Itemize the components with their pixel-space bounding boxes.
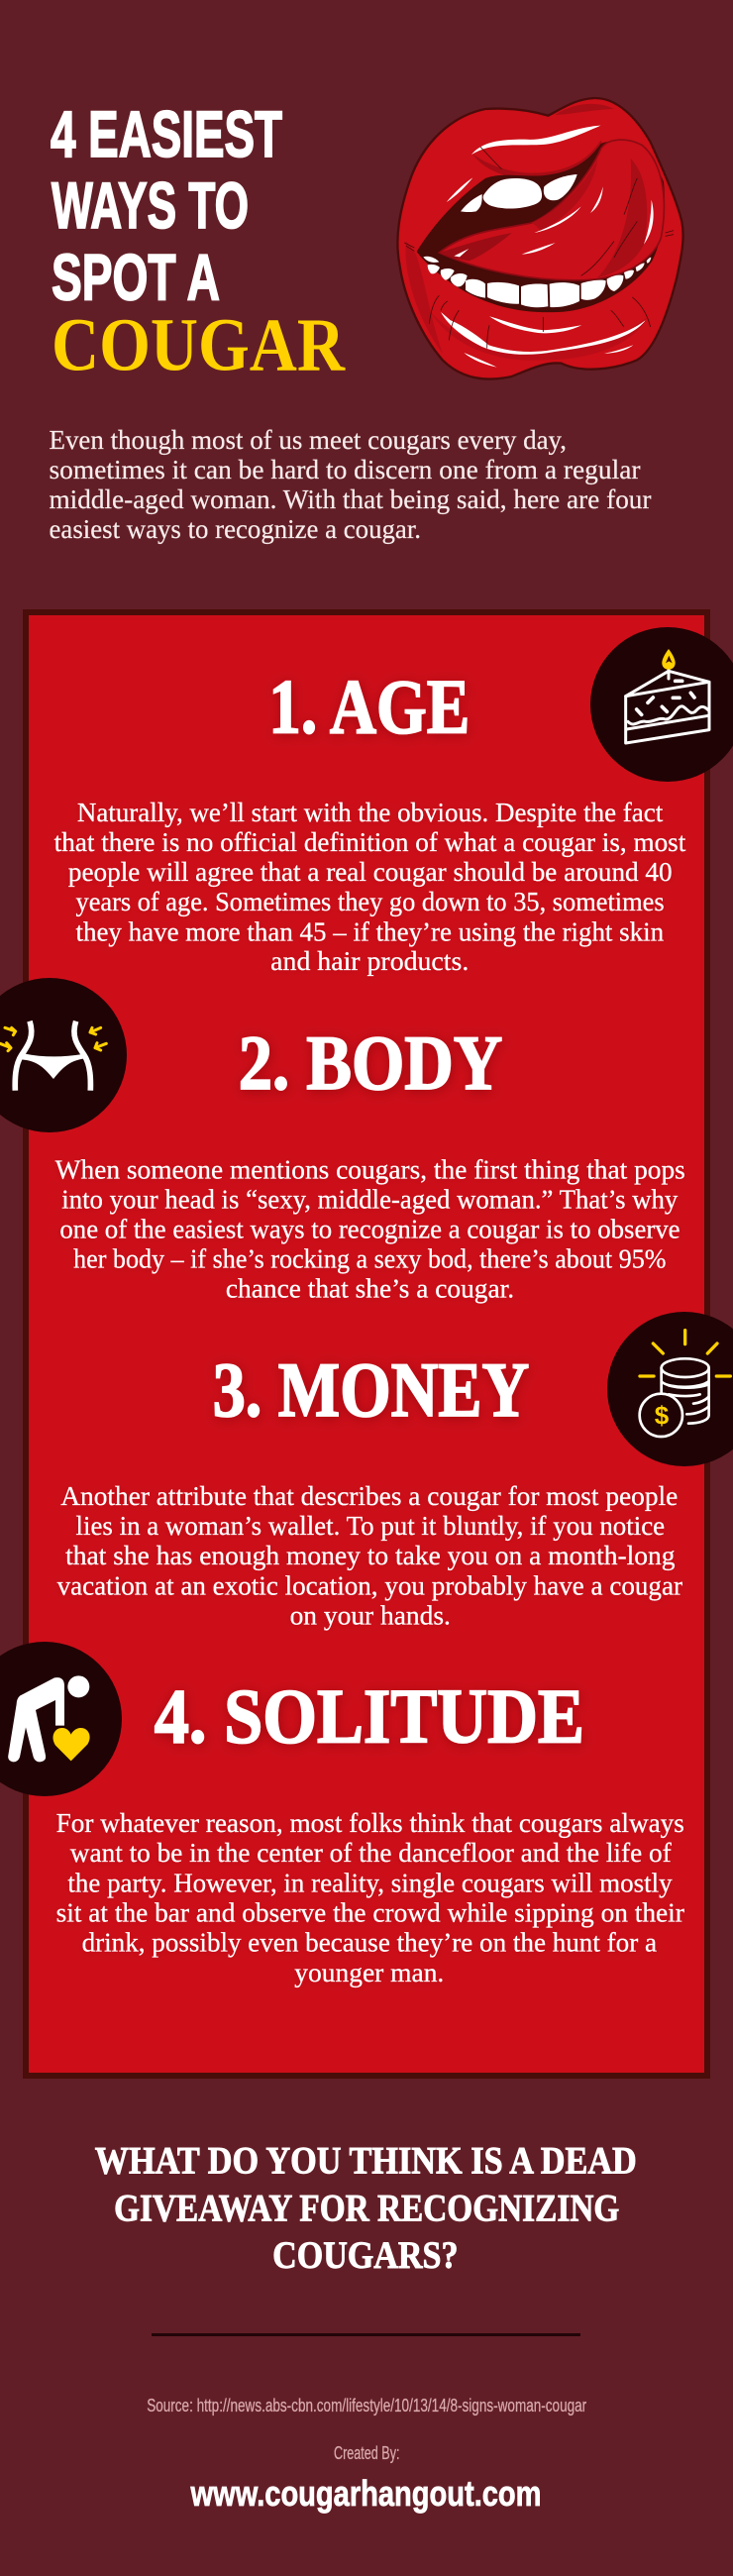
text block: age: and hair products. — [270, 946, 469, 976]
text block: age: that there is no official definition of what a cougar is, most — [54, 827, 686, 857]
text block: age: Naturally, we’ll start with the obvious. Despite the fact — [77, 798, 664, 827]
text block: solitude: drink, possibly even because they’re on the hunt for a — [82, 1928, 657, 1958]
text block: solitude — [56, 1808, 684, 1987]
text block: body: into your head is “sexy, middle-aged woman.” That’s why — [61, 1185, 679, 1215]
crease lines — [404, 147, 674, 349]
closing question: GIVEAWAY FOR RECOGNIZING — [114, 2187, 619, 2229]
heading: 2. Body: 2. BODY — [239, 1020, 502, 1106]
text block: age — [54, 798, 686, 976]
lower teeth — [423, 257, 439, 263]
text block: body — [55, 1155, 685, 1304]
closing question: WHAT DO YOU THINK IS A DEAD — [95, 2140, 637, 2183]
title: WAYS TO — [52, 168, 249, 242]
icon: bending figure with heart — [0, 1642, 122, 1796]
intro text: easiest ways to recognize a cougar. — [50, 514, 421, 544]
upper teeth — [483, 178, 542, 208]
title: COUGAR — [52, 304, 346, 387]
intro text — [50, 425, 652, 544]
text block: body: chance that she’s a cougar. — [226, 1274, 514, 1304]
text block: body: one of the easiest ways to recognize a cougar is to observe — [59, 1215, 681, 1244]
text block: money: on your hands. — [290, 1601, 451, 1631]
title: 4 EASIEST — [51, 97, 282, 170]
closing question: COUGARS? — [272, 2234, 458, 2277]
intro text: Even though most of us meet cougars every day, — [50, 425, 567, 455]
intro text: middle-aged woman. With that being said, here are four — [50, 484, 652, 514]
icon: waist with arrows — [0, 978, 127, 1132]
text block: money: lies in a woman’s wallet. To put it bluntly, if you notice — [75, 1511, 665, 1541]
text block: age: they have more than 45 – if they’re using the right skin — [75, 916, 665, 946]
intro text: sometimes it can be hard to discern one from a regular — [50, 455, 641, 484]
text block: age: people will agree that a real cougar should be around 40 — [68, 857, 673, 887]
mouth interior — [417, 142, 665, 312]
panel: four ways — [23, 609, 710, 2079]
illustration: red lips with tongue — [397, 98, 683, 379]
source line: Source: http://news.abs-cbn.com/lifestyle/10/13/14/8-signs-woman-cougar — [147, 2396, 586, 2415]
text block: body: her body – if she’s rocking a sexy bod, there’s about 95% — [73, 1244, 667, 1274]
tongue — [439, 140, 664, 280]
closing question — [95, 2140, 637, 2277]
text block: solitude: younger man. — [294, 1958, 444, 1987]
heading: 4. Solitude: 4. SOLITUDE — [155, 1673, 584, 1760]
heading: 3. Money: 3. MONEY — [213, 1346, 529, 1433]
title: SPOT A — [52, 240, 220, 313]
icon: coin stack — [607, 1312, 733, 1466]
title — [51, 97, 346, 387]
text block: age: years of age. Sometimes they go down to 35, sometimes — [75, 887, 665, 916]
text block: money: vacation at an exotic location, you probably have a cougar — [57, 1571, 682, 1601]
heading: 1. Age: 1. AGE — [268, 664, 470, 749]
icon: coin stack: $ — [655, 1401, 670, 1431]
text block: solitude: For whatever reason, most folks think that cougars always — [56, 1808, 684, 1838]
highlights — [471, 126, 601, 155]
text block: money: that she has enough money to take you on a month-long — [65, 1541, 676, 1570]
icon: birthday cake slice — [590, 627, 733, 782]
text block: solitude: the party. However, in reality, single cougars will mostly — [67, 1869, 673, 1898]
text block: solitude: sit at the bar and observe the crowd while sipping on their — [56, 1898, 684, 1928]
text block: money: Another attribute that describes a cougar for most people — [60, 1481, 678, 1511]
website: www.cougarhangout.com — [190, 2473, 541, 2514]
created by label: Created By: — [334, 2443, 400, 2463]
text block: body: When someone mentions cougars, the first thing that pops — [55, 1155, 685, 1185]
text block: solitude: want to be in the center of the dancefloor and the life of — [70, 1838, 672, 1868]
text block: money — [57, 1481, 682, 1631]
